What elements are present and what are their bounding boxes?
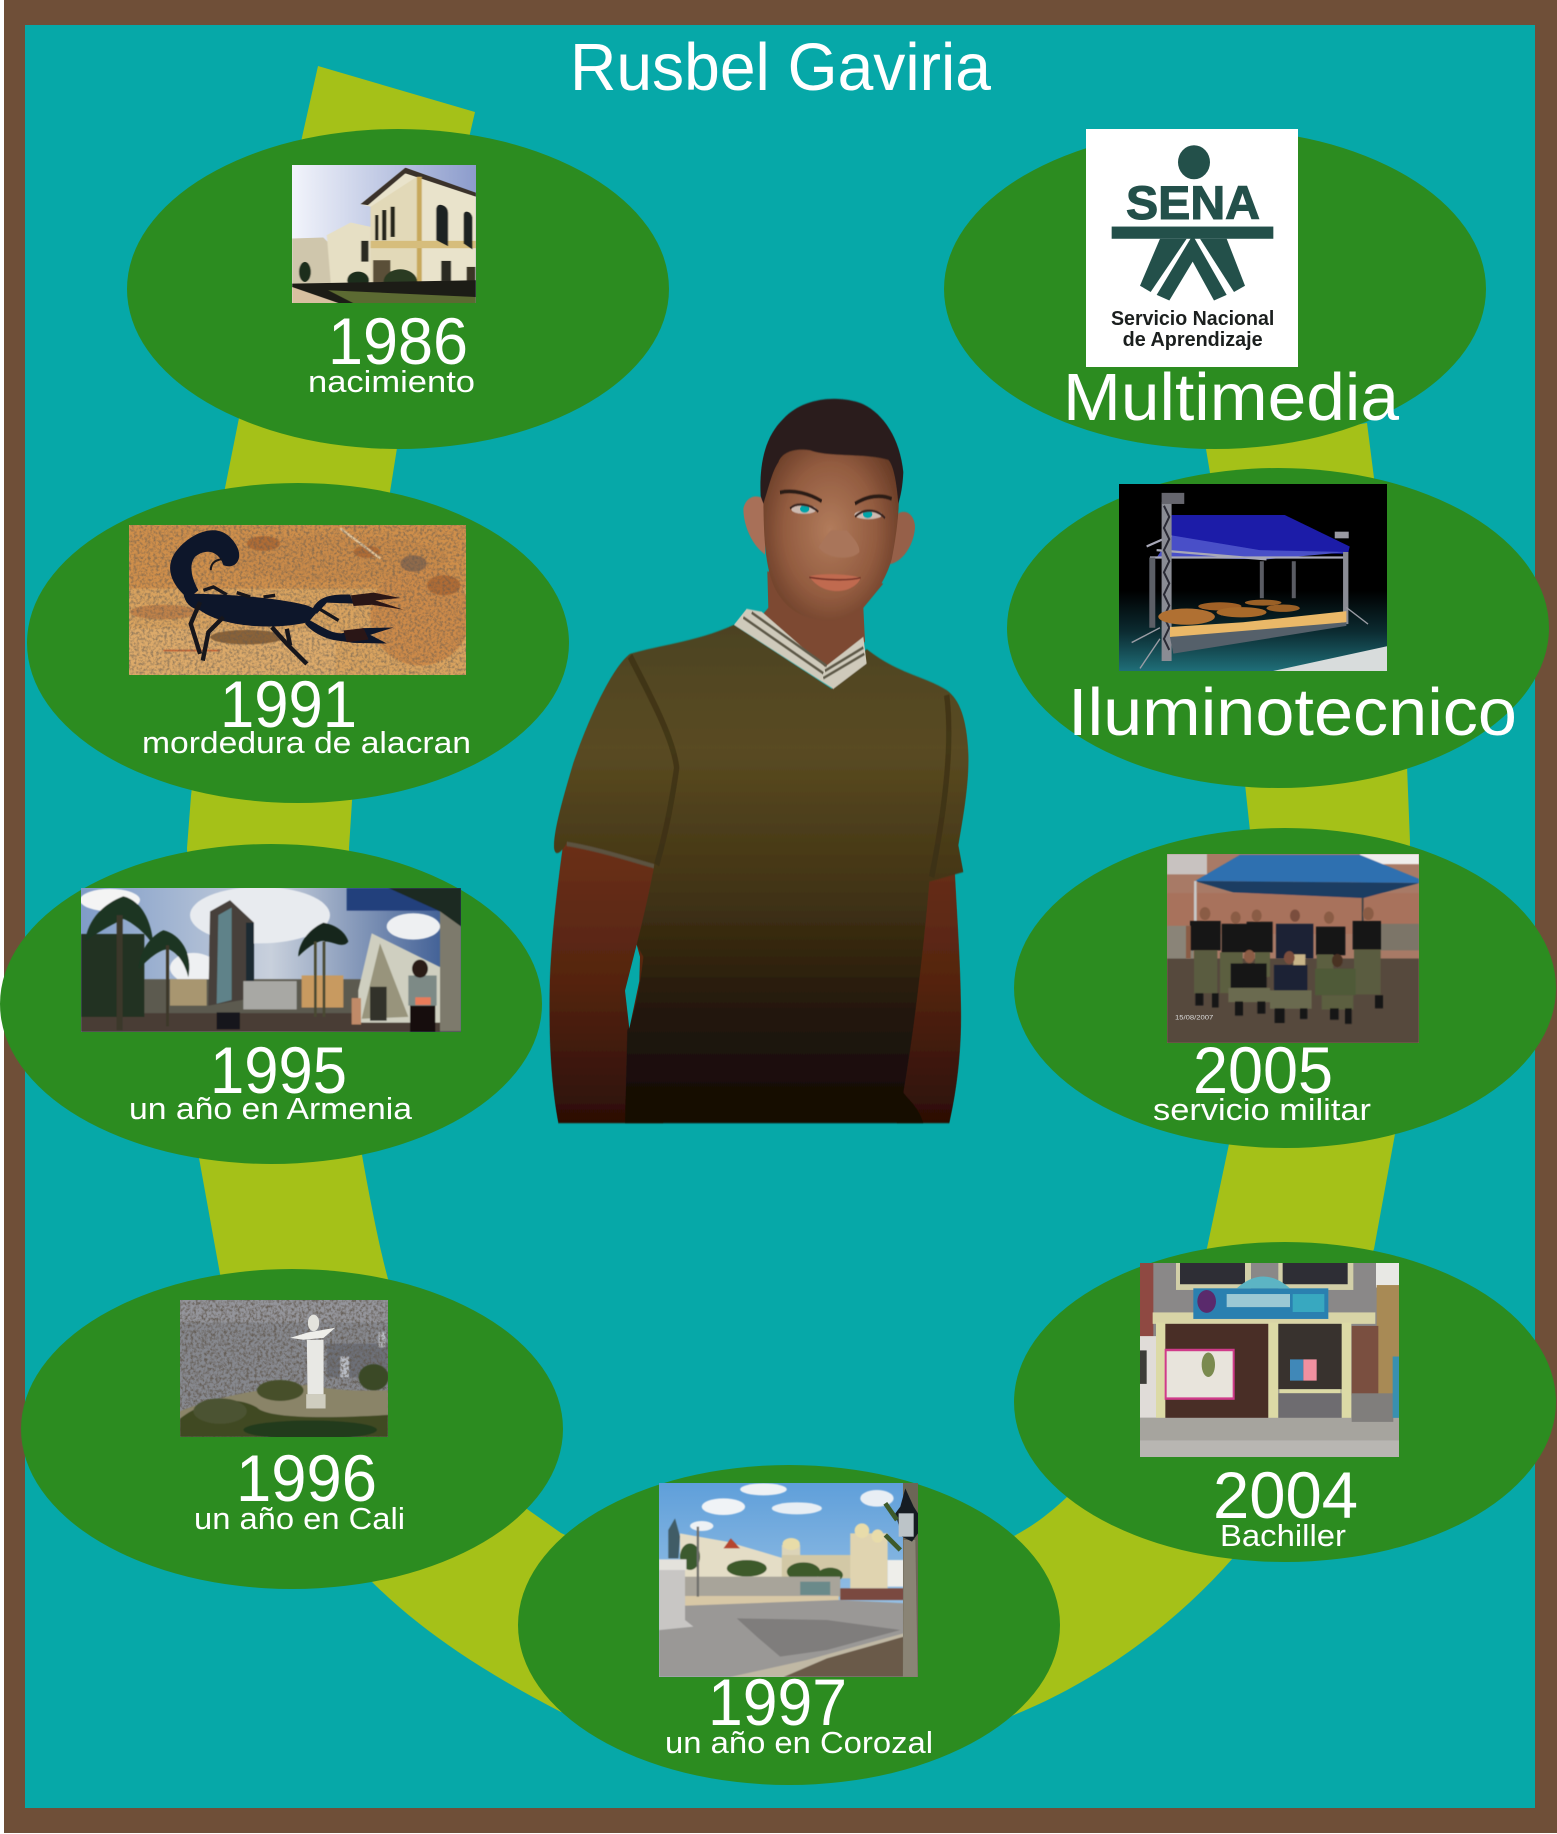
caption: mordedura de alacran: [142, 725, 471, 760]
panel: 1997 un año en Corozal: [518, 1465, 1060, 1785]
year: 1997: [708, 1665, 847, 1739]
photo: Colegio Alexander Fleming: [1140, 1263, 1399, 1457]
photo: scorpion: [129, 525, 466, 675]
panel: 1995 un año en Armenia: [0, 844, 542, 1164]
year: 1995: [210, 1033, 347, 1107]
panel: 1991 mordedura de alacran: [27, 483, 569, 803]
caption: nacimiento: [308, 364, 475, 399]
label: Multimedia: [1063, 360, 1400, 435]
panel: 1996 un año en Cali: [21, 1269, 563, 1589]
logo: SENA: [1086, 129, 1298, 367]
caption: servicio militar: [1153, 1092, 1371, 1127]
caption: Bachiller: [1220, 1518, 1346, 1553]
title: Rusbel Gaviria: [570, 30, 992, 105]
photo: historic building: [292, 165, 476, 303]
caption: un año en Armenia: [129, 1091, 413, 1126]
photo: Armenia plaza: [81, 888, 461, 1032]
caption: un año en Corozal: [665, 1725, 933, 1760]
logo: SENA: Servicio Nacional: [1111, 308, 1274, 330]
timeline ribbon: [187, 66, 1410, 1717]
photo: lighting stage: [1119, 484, 1387, 671]
panel: 1986 nacimiento: [127, 129, 669, 449]
caption: un año en Cali: [194, 1501, 405, 1536]
year: 1991: [220, 667, 357, 741]
panel: 2005 servicio militar: [1014, 828, 1556, 1148]
panel: Iluminotecnico: [1007, 468, 1549, 788]
photo: Corozal plaza and church: [659, 1483, 918, 1677]
logo: SENA: SENA: [1126, 176, 1260, 230]
date stamp: 15/08/2007: [1175, 1015, 1214, 1022]
year: 1996: [236, 1441, 377, 1515]
panel: 2004 Bachiller: [1014, 1242, 1556, 1562]
panel: Multimedia: [944, 129, 1486, 449]
year: 2005: [1193, 1033, 1333, 1107]
year: 2004: [1213, 1458, 1358, 1532]
photo: military group: [1167, 854, 1419, 1043]
label: Iluminotecnico: [1068, 675, 1517, 750]
logo: SENA: de Aprendizaje: [1123, 329, 1263, 351]
portrait: Rusbel Gaviria: [550, 398, 969, 1124]
photo: Cali statue over the city: [180, 1300, 388, 1437]
year: 1986: [328, 304, 468, 378]
